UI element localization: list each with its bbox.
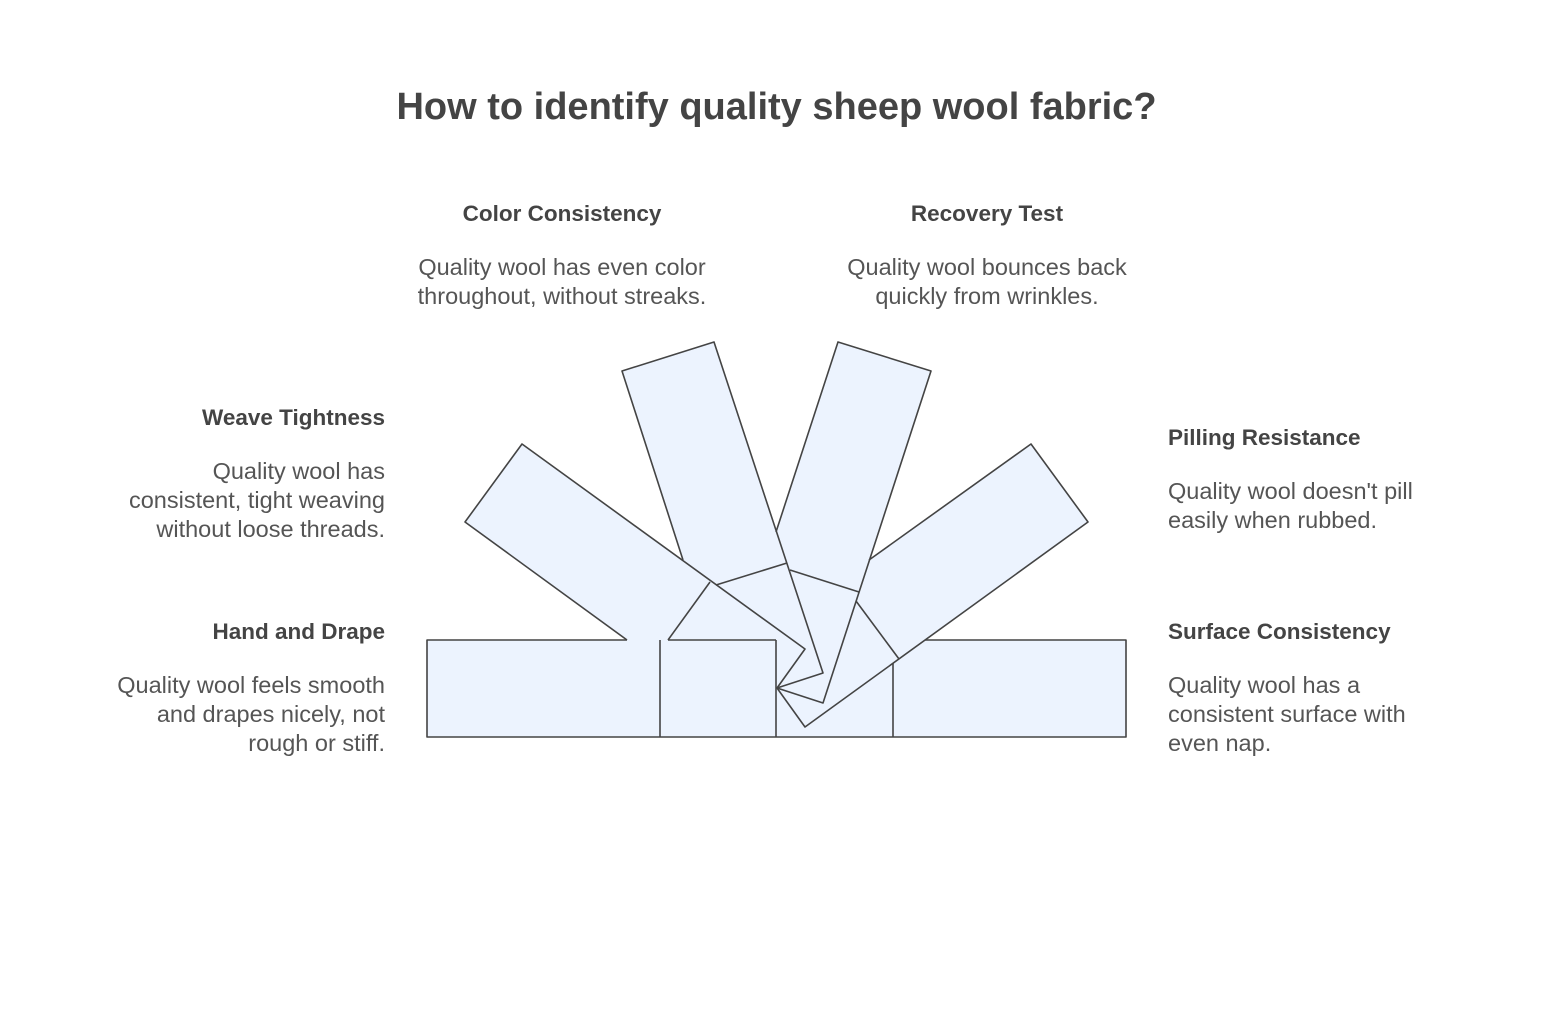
block: hand and drape [117,619,385,756]
block: hand and drape: rough or stiff. [248,730,385,756]
block: recovery test: quickly from wrinkles. [875,283,1099,309]
block: surface consistency: Quality wool has a [1168,672,1360,698]
block: color consistency [418,201,706,309]
recovery arm [776,342,931,703]
block: pilling resistance: easily when rubbed. [1168,507,1377,533]
pilling arm [777,444,1088,727]
block: color consistency: throughout, without streaks. [418,283,706,309]
weave arm [465,444,805,688]
block: weave tightness: consistent, tight weaving [129,487,385,513]
block: weave tightness [129,405,385,542]
block: pilling resistance [1168,425,1413,533]
block: surface consistency [1168,619,1406,756]
block: weave tightness: Weave Tightness [202,405,385,430]
block: hand and drape: Hand and Drape [212,619,385,644]
title: How to identify quality sheep wool fabric? [396,86,1157,128]
block: weave tightness: Quality wool has [213,458,385,484]
block: recovery test [847,201,1127,309]
block: pilling resistance: Pilling Resistance [1168,425,1361,450]
block: hand and drape: Quality wool feels smooth [117,672,385,698]
block: surface consistency: Surface Consistency [1168,619,1391,644]
block: hand and drape: and drapes nicely, not [157,701,385,727]
block: color consistency: Quality wool has even color [418,254,706,280]
block: recovery test: Recovery Test [911,201,1063,226]
block: surface consistency: consistent surface with [1168,701,1406,727]
block: surface consistency: even nap. [1168,730,1271,756]
color arm [622,342,823,688]
block: weave tightness: without loose threads. [156,516,385,542]
block: recovery test: Quality wool bounces back [847,254,1127,280]
block: color consistency: Color Consistency [463,201,661,226]
block: pilling resistance: Quality wool doesn't pill [1168,478,1413,504]
